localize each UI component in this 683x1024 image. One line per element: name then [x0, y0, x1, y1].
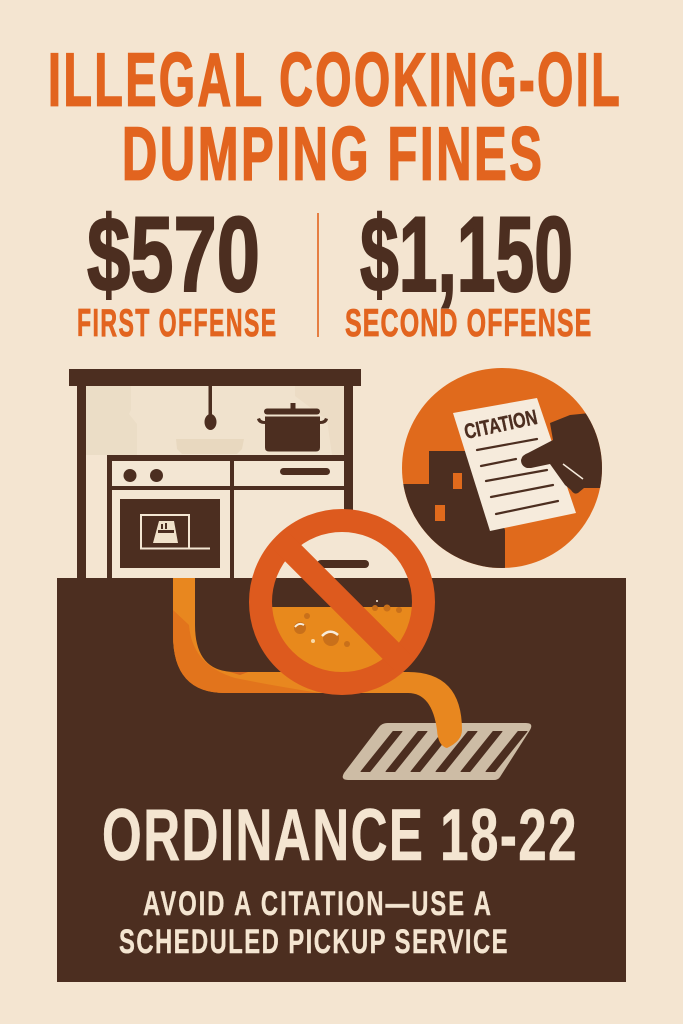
title — [48, 39, 620, 196]
second offense fine: $1,150 — [360, 194, 573, 314]
title: DUMPING FINES — [122, 113, 542, 196]
infographic canvas — [50, 52, 626, 982]
storm drain grate — [343, 723, 531, 780]
second offense fine — [345, 194, 591, 344]
call to action: SCHEDULED PICKUP SERVICE — [119, 923, 507, 961]
call to action — [119, 885, 508, 961]
divider — [317, 213, 319, 337]
prohibition sign — [260, 520, 424, 684]
bubbles — [294, 600, 402, 647]
first offense fine — [77, 194, 276, 344]
stove cabinet — [107, 455, 344, 578]
first offense fine: FIRST OFFENSE — [77, 301, 276, 344]
citation paper: CITATION — [462, 406, 539, 444]
citation paper — [453, 398, 576, 531]
ground panel — [57, 578, 626, 982]
building silhouette — [400, 451, 505, 570]
hand pointing — [521, 413, 610, 494]
kitchen illustration — [69, 369, 361, 578]
citation badge — [400, 368, 610, 570]
oil stream — [173, 578, 462, 748]
hanging spoon — [204, 386, 216, 430]
pot — [257, 403, 328, 452]
second offense fine: SECOND OFFENSE — [345, 302, 591, 344]
call to action: AVOID A CITATION—USE A — [143, 885, 491, 923]
ordinance heading: ORDINANCE 18-22 — [102, 795, 577, 876]
title: ILLEGAL COOKING-OIL — [48, 39, 620, 122]
oil pool inside sign — [272, 560, 412, 672]
first offense fine: $570 — [87, 194, 260, 314]
